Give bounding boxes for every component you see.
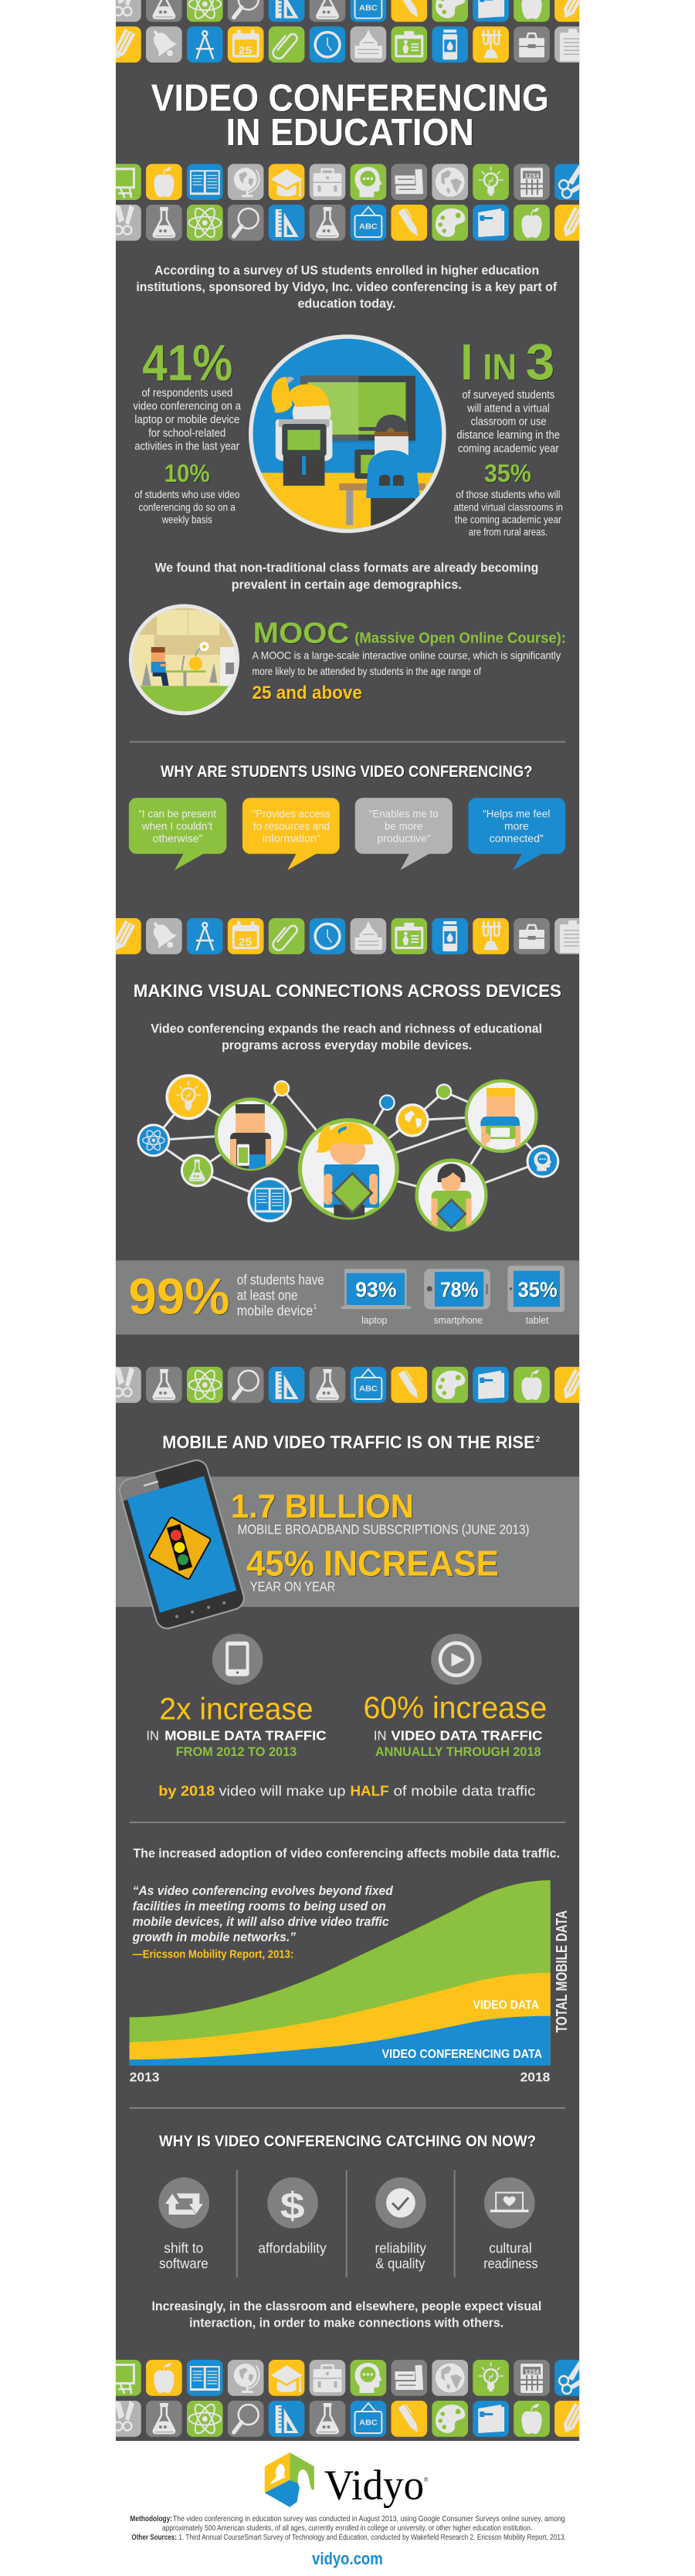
stat: 41%: activities in the last year xyxy=(134,441,239,453)
Vidyo logo: ® xyxy=(424,2476,429,2483)
title: VIDEO CONFERENCING xyxy=(151,77,549,119)
MOOC text block: MOOC xyxy=(253,618,349,650)
stat: 41%: 41% xyxy=(142,335,232,391)
band: 99% own a mobile device xyxy=(116,1260,579,1334)
chart intro text: The increased adoption of video conferencing affects mobile data traffic. xyxy=(133,1847,560,1861)
node: atom xyxy=(137,1124,170,1157)
stat: 41%: of respondents used xyxy=(141,387,232,399)
band: 99% own a mobile device: of students have xyxy=(237,1272,324,1287)
closing statement: Increasingly, in the classroom and elsewhere, people expect visual xyxy=(151,2300,541,2313)
area chart: total mobile data: TOTAL MOBILE DATA xyxy=(554,1910,571,2032)
device network diagram xyxy=(137,1074,559,1232)
person: student with tablet (right lower) xyxy=(415,1158,488,1232)
tablet stat: tablet xyxy=(526,1314,549,1326)
stat: 35%: are from rural areas. xyxy=(469,526,548,537)
smartphone stat: 78% xyxy=(440,1277,479,1301)
stat: 1 in 3 xyxy=(456,334,560,455)
node: book xyxy=(247,1178,292,1222)
icon rows: top: ABC xyxy=(359,4,378,12)
methodology and sources: 1. Third Annual CourseSmart Survey of Technology and Education, conducted by Wakefield Research 2. Ericsson Mobility Report, 2013. xyxy=(178,2534,566,2542)
speech bubble: blue: more xyxy=(504,819,529,832)
speech bubble: gray: productive” xyxy=(377,832,431,844)
smartphone stat xyxy=(424,1269,490,1326)
MOOC text block xyxy=(253,618,566,703)
Ericsson quote: “As video conferencing evolves beyond fixed xyxy=(133,1884,394,1898)
icon rows: bottom: ABC xyxy=(359,2419,378,2428)
node: green dot xyxy=(436,1083,452,1100)
speech bubble: yellow xyxy=(242,798,340,870)
stat: 10%: of students who use video xyxy=(134,489,239,500)
non-traditional formats statement xyxy=(154,561,538,591)
stat: 1 in 3: classroom or use xyxy=(471,416,547,429)
intro text: institutions, sponsored by Vidyo, Inc. video conferencing is a key part of xyxy=(136,280,558,294)
icon rows: below title: ABC xyxy=(359,223,378,232)
stat: 35%: attend virtual classrooms in xyxy=(454,501,563,513)
Ericsson quote xyxy=(132,1884,394,1961)
speech bubble: green: otherwise” xyxy=(153,832,202,844)
MOOC illustration xyxy=(129,604,239,717)
non-traditional formats statement: prevalent in certain age demographics. xyxy=(232,578,462,591)
infographic content xyxy=(96,0,591,2568)
reason: cultural readiness: readiness xyxy=(483,2256,538,2271)
methodology and sources: The video conferencing in education survey was conducted in August 2013, using Google Consumer Surveys online survey, among xyxy=(173,2515,565,2523)
dark main panel xyxy=(116,0,579,2441)
speech bubble: yellow: information” xyxy=(263,832,320,844)
heading: making visual connections: MAKING VISUAL CONNECTIONS ACROSS DEVICES xyxy=(134,981,561,1001)
non-traditional formats statement: We found that non-traditional class formats are already becoming xyxy=(154,561,538,575)
stat: 1 in 3: 3 xyxy=(526,334,554,391)
person: student with tablet (right upper) xyxy=(465,1080,538,1153)
MOOC text block: more likely to be attended by students in the age range of xyxy=(253,665,481,677)
stat: video data traffic: IN xyxy=(374,1727,387,1743)
stat: mobile data traffic: 2x increase xyxy=(159,1693,314,1727)
reason: shift to software: software xyxy=(159,2256,208,2271)
node: globe xyxy=(395,1103,429,1137)
MOOC text block: 25 and above xyxy=(253,683,362,703)
icon: play xyxy=(431,1634,482,1685)
Vidyo logo xyxy=(265,2452,429,2509)
methodology and sources: approximately 500 American students, of all ages, currently enrolled in college or university, or other higher education institution. xyxy=(162,2524,532,2533)
band: 99% own a mobile device: mobile device xyxy=(237,1303,313,1318)
Ericsson quote: facilities in meeting rooms to being used on xyxy=(133,1900,386,1913)
reason: affordability: affordability xyxy=(258,2240,327,2256)
icon row: lower middle: ABC xyxy=(359,1385,378,1394)
stat: 1 in 3: will attend a virtual xyxy=(466,402,550,415)
heading: mobile and video traffic: MOBILE AND VIDEO TRAFFIC IS ON THE RISE xyxy=(162,1432,535,1452)
stat: 35%: the coming academic year xyxy=(455,514,561,525)
boy xyxy=(375,436,409,456)
stat: 41%: laptop or mobile device xyxy=(134,414,239,426)
stat: mobile data traffic: MOBILE DATA TRAFFIC xyxy=(164,1727,327,1743)
closing statement xyxy=(151,2300,541,2330)
statement: by 2018 video will make up half: of mobile data traffic xyxy=(394,1783,535,1799)
website link text: vidyo.com xyxy=(312,2549,383,2568)
stat: 35%: 35% xyxy=(484,459,531,487)
speech bubble: green: when I couldn’t xyxy=(141,819,212,832)
stat: 10%: conferencing do so on a xyxy=(138,501,236,513)
title: IN EDUCATION xyxy=(226,112,474,154)
Ericsson quote: growth in mobile networks.” xyxy=(132,1930,297,1944)
heading: why is video conferencing catching on: WHY IS VIDEO CONFERENCING CATCHING ON NOW? xyxy=(159,2132,536,2150)
icon: smartphone with traffic light xyxy=(117,1458,246,1631)
Ericsson quote: mobile devices, it will also drive video traffic xyxy=(133,1915,389,1929)
statement: by 2018 video will make up half xyxy=(158,1783,535,1799)
node: bulb xyxy=(165,1074,211,1120)
connections intro text: Video conferencing expands the reach and richness of educational xyxy=(151,1022,542,1035)
icon rows: top xyxy=(105,0,591,63)
stat: 41% xyxy=(133,335,242,453)
stat: 10%: 10% xyxy=(164,459,210,487)
node: head xyxy=(527,1144,559,1178)
stat: 35% xyxy=(454,459,563,537)
stat: 10%: weekly basis xyxy=(161,514,212,525)
reason: affordability: $ xyxy=(280,2186,305,2227)
intro text xyxy=(136,264,558,310)
Vidyo logo: Vidyo xyxy=(324,2462,424,2509)
band: mobile broadband stats: MOBILE BROADBAND SUBSCRIPTIONS (JUNE 2013) xyxy=(238,1522,529,1537)
area chart: total mobile data: 2013 xyxy=(130,2070,159,2085)
stat: 10% xyxy=(134,459,239,525)
methodology and sources: Other Sources: xyxy=(131,2534,177,2542)
person: student with tablet (center) xyxy=(298,1118,399,1222)
band: mobile broadband stats xyxy=(116,1476,579,1607)
band: 99% own a mobile device: 99% xyxy=(128,1268,229,1325)
area chart: total mobile data xyxy=(130,1880,571,2085)
stat: 1 in 3: of surveyed students xyxy=(462,389,554,402)
stat: 1 in 3: I xyxy=(460,334,473,391)
band: 99% own a mobile device: at least one xyxy=(237,1287,297,1303)
speech bubble: blue xyxy=(468,798,565,870)
stat: mobile data traffic xyxy=(146,1634,327,1759)
speech bubble: gray: “Enables me to xyxy=(369,807,439,819)
methodology and sources xyxy=(130,2515,566,2542)
stat: 1 in 3: coming academic year xyxy=(458,442,559,455)
icon row: middle: 25 xyxy=(239,936,253,948)
title xyxy=(151,77,549,154)
stat: 41%: for school-related xyxy=(148,427,225,439)
closing statement: interaction, in order to make connections with others. xyxy=(189,2316,503,2330)
icon: phone xyxy=(212,1634,263,1685)
reason: cultural readiness: cultural xyxy=(489,2240,532,2256)
Ericsson quote: —Ericsson Mobility Report, 2013: xyxy=(133,1948,293,1961)
statement: by 2018 video will make up half: video will make up xyxy=(219,1783,345,1799)
desk xyxy=(346,490,353,525)
laptop stat: laptop xyxy=(361,1314,387,1326)
stat: video data traffic: ANNUALLY THROUGH 2018 xyxy=(375,1745,541,1759)
band: mobile broadband stats: YEAR ON YEAR xyxy=(250,1579,335,1595)
area chart: total mobile data: VIDEO CONFERENCING DATA xyxy=(382,2048,543,2061)
speech bubble: gray: be more xyxy=(385,819,422,832)
icon rows: below title: 1234 xyxy=(525,173,540,180)
icon row: middle xyxy=(105,916,591,954)
stat: mobile data traffic: IN xyxy=(146,1727,159,1743)
tablet stat: 35% xyxy=(517,1277,558,1301)
MOOC text block: (Massive Open Online Course): xyxy=(354,630,566,647)
stat: mobile data traffic: FROM 2012 TO 2013 xyxy=(176,1745,297,1759)
reason: reliability and quality xyxy=(375,2178,426,2271)
speech bubble: blue: connected” xyxy=(490,832,544,844)
laptop stat xyxy=(341,1269,411,1326)
tablet stat xyxy=(507,1266,564,1326)
stat: video data traffic: 60% increase xyxy=(363,1691,547,1725)
reason: shift to software xyxy=(158,2178,209,2271)
person: student with phone xyxy=(215,1097,287,1171)
intro text: According to a survey of US students enrolled in higher education xyxy=(154,264,539,278)
speech bubble: blue: “Helps me feel xyxy=(483,807,550,819)
reason: shift to software: shift to xyxy=(164,2240,203,2256)
stat: 1 in 3: distance learning in the xyxy=(456,429,560,442)
icon row: lower middle xyxy=(105,1367,591,1403)
heading: why are students using video conferencing: WHY ARE STUDENTS USING VIDEO CONFERENCING? xyxy=(161,762,532,781)
speech bubble: gray xyxy=(355,798,453,870)
icon rows: bottom xyxy=(96,2358,591,2437)
statement: by 2018 video will make up half: HALF xyxy=(350,1783,389,1799)
icon rows: top: 25 xyxy=(239,44,253,56)
girl xyxy=(272,377,293,413)
intro text: education today. xyxy=(297,297,395,310)
speech bubble: green xyxy=(129,798,226,870)
band: 99% own a mobile device: 1 xyxy=(314,1303,317,1310)
stat: 41%: video conferencing on a xyxy=(133,401,242,413)
heading: mobile and video traffic: 2 xyxy=(536,1435,541,1444)
node: blue dot xyxy=(379,1094,395,1110)
band: mobile broadband stats: 45% INCREASE xyxy=(246,1544,499,1584)
reason: reliability and quality: reliability xyxy=(375,2240,426,2256)
stat: video data traffic xyxy=(363,1634,547,1759)
reason: cultural readiness xyxy=(483,2178,538,2271)
statement: by 2018 video will make up half: by 2018 xyxy=(158,1783,215,1799)
stat: video data traffic: VIDEO DATA TRAFFIC xyxy=(391,1727,543,1743)
speech bubble: green: “I can be present xyxy=(138,807,216,819)
node: yellow dot xyxy=(273,1080,290,1096)
node: flask xyxy=(181,1154,213,1187)
speech bubble: yellow: to resources and xyxy=(253,819,330,832)
smartphone stat: smartphone xyxy=(434,1314,483,1326)
MOOC text block: A MOOC is a large-scale interactive online course, which is significantly xyxy=(253,649,561,661)
reason: reliability and quality: & quality xyxy=(375,2256,425,2271)
icon rows: bottom: 1234 xyxy=(525,2368,540,2375)
methodology and sources: Methodology: xyxy=(130,2515,172,2523)
speech bubble: yellow: “Provides access xyxy=(253,807,331,819)
laptop stat: 93% xyxy=(355,1277,397,1301)
connections intro text: programs across everyday mobile devices. xyxy=(222,1039,472,1052)
area chart: total mobile data: VIDEO DATA xyxy=(473,1999,540,2012)
area chart: total mobile data: 2018 xyxy=(520,2070,550,2085)
band: mobile broadband stats: 1.7 BILLION xyxy=(231,1488,414,1526)
reason: affordability xyxy=(258,2178,327,2256)
icon rows: below title xyxy=(96,162,591,241)
stat: 1 in 3: IN xyxy=(483,347,517,388)
stat: 35%: of those students who will xyxy=(456,489,560,500)
connections intro text xyxy=(151,1022,542,1052)
classroom illustration xyxy=(246,334,454,542)
